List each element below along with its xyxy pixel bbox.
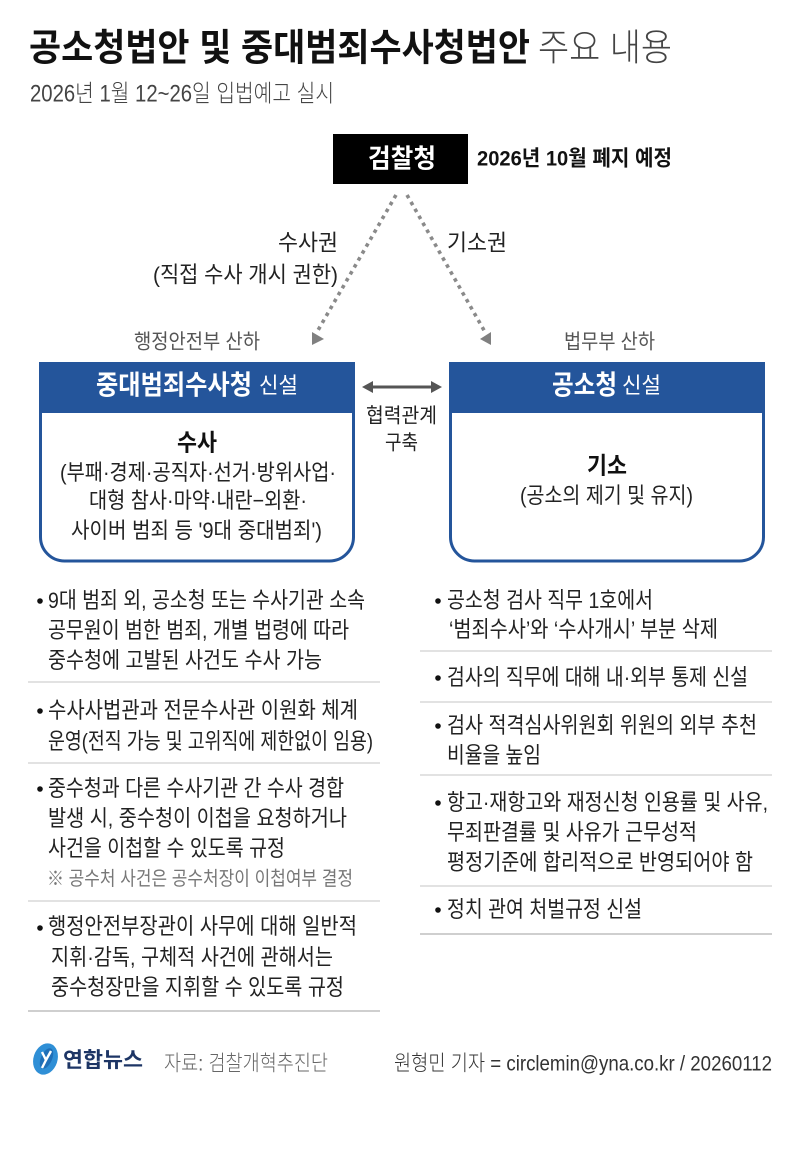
logo: Yonhap News: 연합뉴스 xyxy=(63,1049,143,1072)
bullet: performance evaluation: 무죄판결률 및 사유가 근무성적 xyxy=(447,820,697,845)
bullet: jurisdiction conflicts: 발생 시, 중수청이 이첩을 요청하거나 xyxy=(48,806,347,831)
bullet: scope beyond nine crimes xyxy=(37,588,365,673)
bullet: minister's authority xyxy=(37,914,357,1000)
bullet: performance evaluation: 평정기준에 합리적으로 반영되어야 함 xyxy=(447,850,753,875)
abolition note: 2026년 10월 폐지 예정 xyxy=(477,146,672,170)
title: 주요 내용 xyxy=(538,26,672,68)
text: investigation scope xyxy=(60,430,336,543)
bullet: scope beyond nine crimes: 중수청에 고발된 사건도 수사 가능 xyxy=(48,648,322,673)
bullet: outside recommendation ratio: 검사 적격심사위원회 위원의 외부 추천 xyxy=(447,713,757,738)
note: CIO cases: ※ 공수처 사건은 공수처장이 이첩여부 결정 xyxy=(47,868,353,890)
heading: public indictment agency: 신설 xyxy=(622,373,661,398)
title: 공소청법안 및 중대범죄수사청법안 xyxy=(29,26,530,68)
text: investigation scope: (부패·경제·공직자·선거·방위사업· xyxy=(60,460,336,485)
label: under interior ministry: 행정안전부 산하 xyxy=(134,330,260,354)
text: investigation scope: 수사 xyxy=(177,430,217,456)
bullet: minister's authority: 중수청장만을 지휘할 수 있도록 규정 xyxy=(51,975,344,1000)
panel: public indictment agency xyxy=(449,362,765,561)
bullet: scope beyond nine crimes: 9대 범죄 외, 공소청 또는 수사기관 소속 xyxy=(48,588,365,613)
bullet: jurisdiction conflicts: 중수청과 다른 수사기관 간 수사 경합 xyxy=(48,776,344,801)
label: investigation power xyxy=(153,230,338,288)
heading: serious crimes investigation agency: 신설 xyxy=(259,373,298,398)
prosecutors office box xyxy=(333,134,468,184)
text: investigation scope: 사이버 범죄 등 '9대 중대범죄') xyxy=(71,518,322,543)
bullet: scope beyond nine crimes: 공무원이 범한 범죄, 개별 법령에 따라 xyxy=(48,618,349,643)
bullet: internal and external controls: 검사의 직무에 대해 내·외부 통제 신설 xyxy=(447,665,748,690)
bullet: jurisdiction conflicts: 사건을 이첩할 수 있도록 규정 xyxy=(48,836,285,861)
logo: Yonhap News xyxy=(29,1040,143,1078)
bullet: prosecutor duty clause xyxy=(435,588,718,642)
text: indictment scope xyxy=(520,452,693,508)
label: cooperation: 구축 xyxy=(385,432,418,454)
heading: serious crimes investigation agency: 중대범죄수사청 xyxy=(96,370,252,400)
bullet: minister's authority: 지휘·감독, 구체적 사건에 관해서는 xyxy=(51,945,333,970)
subtitle: 2026년 1월 12~26일 입법예고 실시 xyxy=(30,80,334,108)
text: investigation scope: 대형 참사·마약·내란−외환· xyxy=(89,488,307,513)
label: under justice ministry: 법무부 산하 xyxy=(564,330,655,354)
bullet: outside recommendation ratio xyxy=(435,713,757,768)
bullet: prosecutor duty clause: 공소청 검사 직무 1호에서 xyxy=(447,588,653,613)
label: cooperation: 협력관계 xyxy=(366,404,437,428)
bullet: dual personnel system xyxy=(37,698,373,754)
prosecutors office box: 검찰청 xyxy=(368,144,436,174)
bullet: prosecutor duty clause: ‘범죄수사’와 ‘수사개시’ 부분 삭제 xyxy=(449,617,718,642)
bullet: jurisdiction conflicts xyxy=(37,776,353,890)
label: investigation power: 수사권 xyxy=(278,230,338,256)
bullet: minister's authority: 행정안전부장관이 사무에 대해 일반적 xyxy=(48,914,357,939)
arrow: investigation power xyxy=(312,195,396,345)
label: cooperation xyxy=(366,404,437,454)
heading: public indictment agency xyxy=(552,370,661,400)
bullet: outside recommendation ratio: 비율을 높임 xyxy=(447,743,541,768)
bullet: dual personnel system: 수사사법관과 전문수사관 이원화 체계 xyxy=(48,698,358,723)
bullet: performance evaluation xyxy=(435,790,768,875)
panel: serious crimes investigation agency xyxy=(39,362,355,561)
heading: public indictment agency: 공소청 xyxy=(552,370,617,400)
source: 자료: 검찰개혁추진단 xyxy=(164,1052,328,1076)
label: indictment power: 기소권 xyxy=(447,230,507,256)
arrow: cooperation xyxy=(362,381,442,393)
bullet: political interference penalty: 정치 관여 처벌규정 신설 xyxy=(447,897,642,922)
arrow: indictment power xyxy=(407,195,491,345)
bullet: dual personnel system: 운영(전직 가능 및 고위직에 제한없이 임용) xyxy=(48,729,373,754)
text: indictment scope: 기소 xyxy=(587,452,627,478)
label: investigation power: (직접 수사 개시 권한) xyxy=(153,262,338,288)
text: indictment scope: (공소의 제기 및 유지) xyxy=(520,483,693,508)
